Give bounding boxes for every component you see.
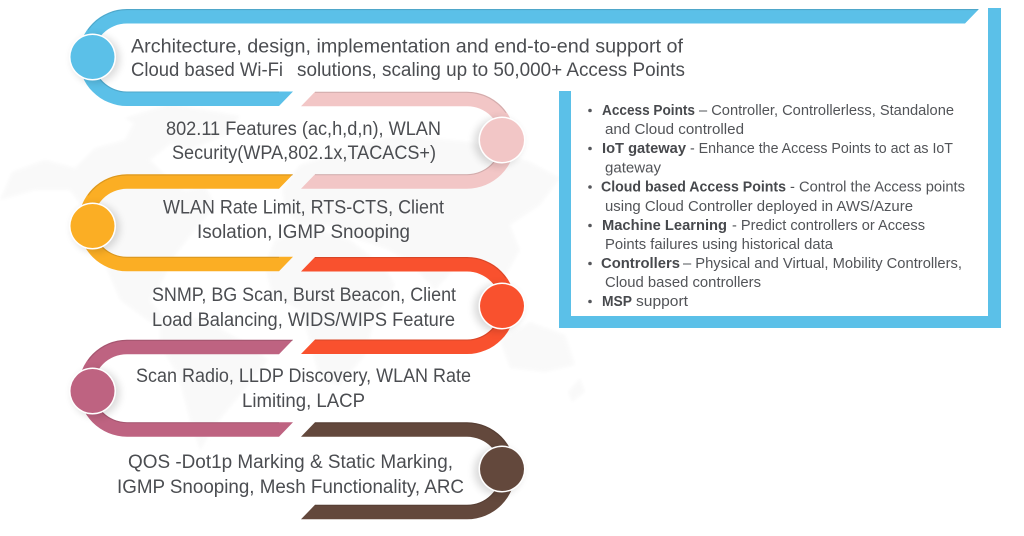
item: machine learning: Points failures using historical data xyxy=(605,237,834,253)
text: scan radio xyxy=(136,366,471,412)
node: mauve circle xyxy=(69,368,120,417)
text: scan radio: Limiting, LACP xyxy=(242,391,365,412)
node: orange circle xyxy=(69,202,120,252)
item: cloud based access points: using Cloud Controller deployed in AWS/Azure xyxy=(605,199,913,215)
band 3: orange xyxy=(79,174,293,271)
item: controllers: Controllers xyxy=(601,256,680,272)
item: IoT gateway xyxy=(588,141,953,176)
text: rate limit: Isolation, IGMP Snooping xyxy=(197,222,410,243)
band 6: brown xyxy=(301,422,515,519)
band 1: blue xyxy=(79,9,979,106)
item: MSP support: support xyxy=(636,294,688,310)
node: brown circle xyxy=(474,446,526,495)
text: rate limit xyxy=(163,198,445,243)
text: architecture: Cloud based Wi-Fi xyxy=(131,60,283,81)
item: IoT gateway: - Enhance the Access Points to act as IoT xyxy=(690,141,953,157)
text: rate limit: WLAN Rate Limit, RTS-CTS, Client xyxy=(163,198,445,218)
text: QOS: QOS -Dot1p Marking & Static Marking, xyxy=(128,452,453,473)
text: 802.11 features xyxy=(166,119,441,164)
item: access points: – Controller, Controllerless, Standalone xyxy=(699,103,954,119)
node: red circle xyxy=(474,282,526,332)
panel frame xyxy=(559,8,1001,328)
item: access points: and Cloud controlled xyxy=(605,122,744,138)
item: cloud based access points xyxy=(588,180,965,215)
text: QOS: IGMP Snooping, Mesh Functionality, ARC xyxy=(117,477,464,498)
item: IoT gateway: IoT gateway xyxy=(602,141,686,157)
item: controllers xyxy=(588,256,962,291)
panel: capabilities xyxy=(559,8,1001,328)
text: QOS xyxy=(117,452,464,498)
band 5: mauve xyxy=(79,340,293,437)
item: MSP support: MSP xyxy=(602,294,632,310)
text: SNMP: SNMP, BG Scan, Burst Beacon, Client xyxy=(152,285,457,306)
text: 802.11 features: 802.11 Features (ac,h,d,n), WLAN xyxy=(166,119,441,140)
background world map xyxy=(0,104,585,450)
text: architecture: solutions, scaling up to 50,000+ Access Points xyxy=(297,60,685,81)
item: IoT gateway: gateway xyxy=(605,160,662,176)
item: MSP support xyxy=(588,294,688,310)
item: controllers: – Physical and Virtual, Mobility Controllers, xyxy=(683,256,962,272)
text: architecture: Architecture, design, implementation and end-to-end support of xyxy=(131,36,684,58)
item: access points xyxy=(588,103,954,138)
item: controllers: Cloud based controllers xyxy=(605,275,761,291)
item: access points: Access Points xyxy=(602,103,695,119)
band 4: red xyxy=(301,257,515,354)
band 2: pink xyxy=(301,92,515,189)
text: SNMP: Load Balancing, WIDS/WIPS Feature xyxy=(152,310,455,331)
item: machine learning xyxy=(588,218,925,253)
item: cloud based access points: Cloud based Access Points xyxy=(601,180,786,196)
item: cloud based access points: - Control the Access points xyxy=(790,180,965,196)
text: SNMP xyxy=(152,285,457,331)
node: blue circle xyxy=(69,34,120,83)
text: 802.11 features: Security(WPA,802.1x,TACACS+) xyxy=(172,143,436,164)
item: machine learning: Machine Learning xyxy=(602,218,727,234)
node: pink circle xyxy=(474,116,526,166)
item: machine learning: - Predict controllers or Access xyxy=(732,218,925,234)
text: architecture xyxy=(131,36,685,81)
text: scan radio: Scan Radio, LLDP Discovery, WLAN Rate xyxy=(136,366,471,387)
